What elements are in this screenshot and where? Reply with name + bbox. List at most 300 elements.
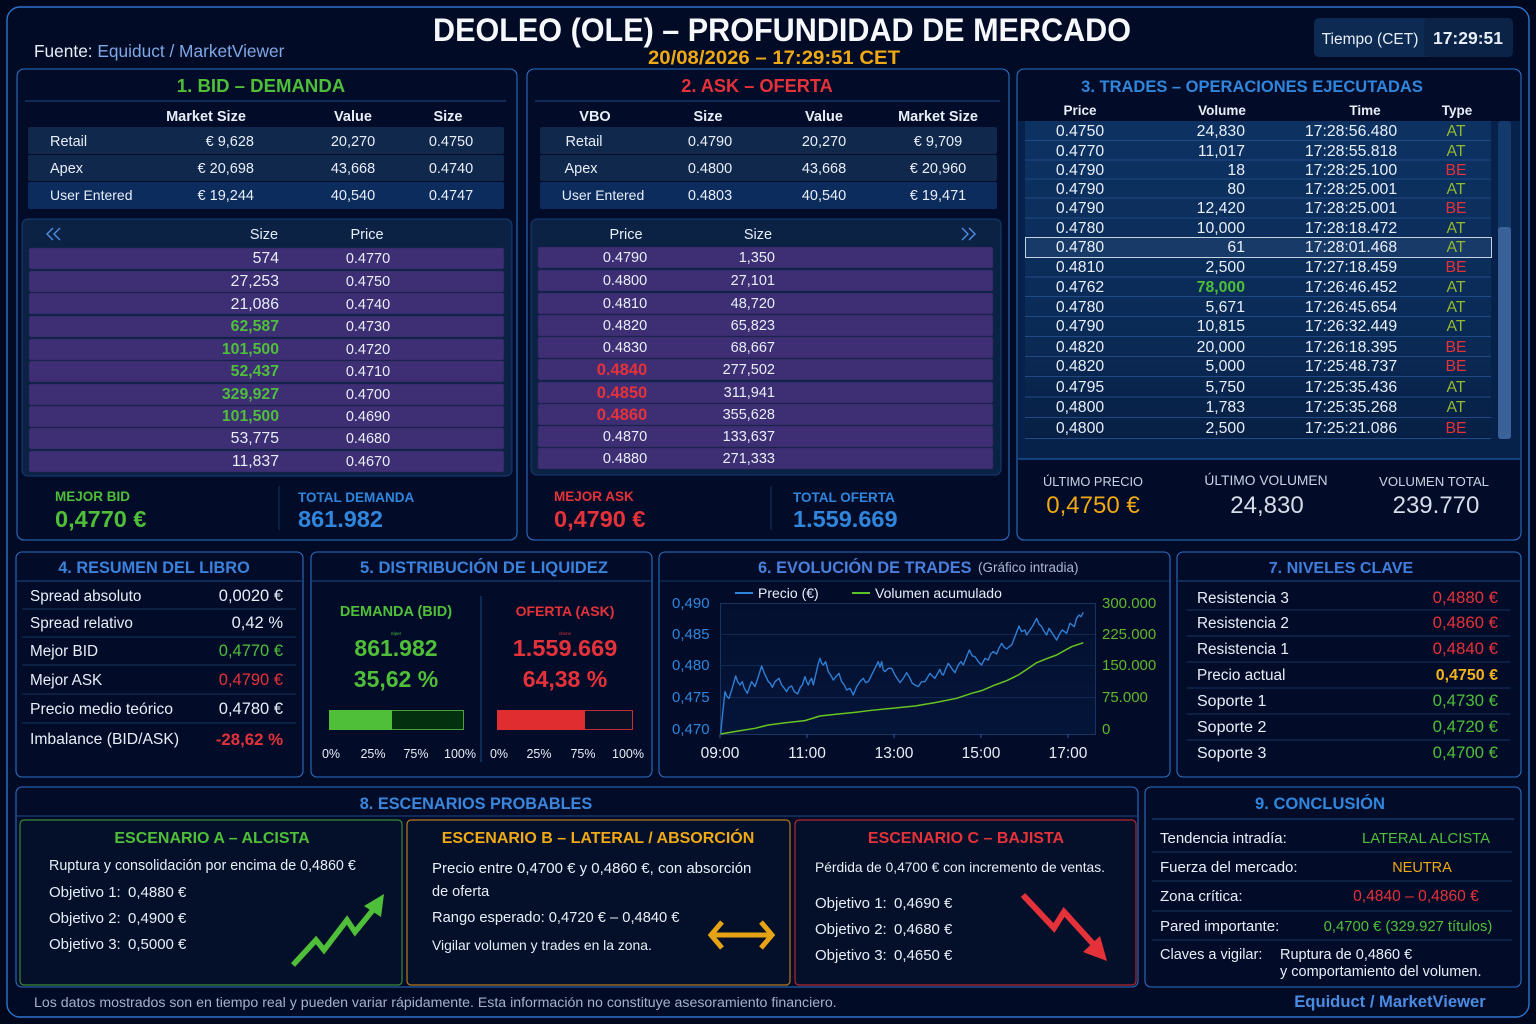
ask order book: 0.4820: [603, 318, 647, 334]
ask order book: 0.4850: [597, 384, 647, 402]
level rows: Resistencia 1: [1197, 641, 1289, 658]
stat: ultimo precio: [1043, 474, 1143, 519]
stat: ultimo volumen: 24,830: [1230, 492, 1304, 519]
scenario B: Rango esperado: 0,4720 € – 0,4840 €: [432, 910, 679, 926]
conclusion rows: Zona crítica:: [1160, 888, 1243, 905]
level rows: Soporte 1: [1197, 693, 1266, 710]
panel 1: bid: [17, 69, 517, 540]
conclusion rows: Ruptura de 0,4860 €: [1280, 947, 1412, 963]
summary rows: -28,62 %: [216, 730, 283, 749]
heading: ask: 2. ASK – OFERTA: [681, 76, 833, 96]
ask order book: 355,628: [723, 407, 775, 423]
scenario C: 0,4690 €: [894, 895, 953, 912]
trades table: 0,4800: [1056, 399, 1104, 416]
trades table: Type: [1442, 103, 1473, 118]
trades table: 0.4790: [1056, 200, 1104, 217]
trades table: 17:28:25.001: [1305, 200, 1397, 217]
bid order book: 62,587: [231, 318, 279, 335]
trades table: 80: [1227, 181, 1245, 198]
ask order book: 0.4830: [603, 340, 647, 356]
summary rows: 0,42 %: [232, 614, 283, 632]
time box: Tiempo (CET): [1322, 31, 1418, 48]
trades table: BE: [1445, 420, 1467, 437]
trades table: 17:28:55.818: [1305, 143, 1397, 160]
bid order book: 27,253: [231, 273, 279, 290]
ask order book: 0.4800: [603, 273, 647, 289]
trades table: 61: [1227, 239, 1245, 256]
ask summary table: Apex: [564, 161, 598, 177]
level rows: 0,4860 €: [1433, 613, 1499, 632]
supply column: 0%: [490, 747, 508, 761]
trades table: 17:26:32.449: [1305, 318, 1397, 335]
scenario C: Objetivo 3:: [815, 947, 887, 964]
trades table: 17:28:25.100: [1305, 162, 1397, 179]
conclusion rows: 0,4700 € (329.927 títulos): [1324, 919, 1492, 935]
ask order book: 68,667: [731, 340, 775, 356]
trades table: AT: [1446, 379, 1466, 396]
ask order book: 48,720: [731, 296, 775, 312]
panel 9: conclusion: [1145, 787, 1521, 987]
trades table: AT: [1446, 181, 1466, 198]
trades table: 17:28:18.472: [1305, 220, 1397, 237]
left axis: 0,475: [672, 689, 710, 706]
scenario A: Objetivo 1:: [49, 884, 121, 901]
bid order book: 0.4720: [346, 342, 390, 358]
trades table: 10,815: [1197, 318, 1245, 335]
trades table: BE: [1445, 358, 1467, 375]
trades table: [1018, 103, 1520, 459]
heading: bid: 1. BID – DEMANDA: [177, 75, 345, 96]
stat: volumen total: VOLUMEN TOTAL: [1379, 474, 1489, 489]
conclusion rows: NEUTRA: [1392, 860, 1452, 876]
time axis: 17:00: [1049, 745, 1088, 762]
stat: mejor ask: [554, 489, 645, 532]
scenario A: 0,5000 €: [128, 936, 187, 953]
volume line: [721, 643, 1083, 734]
trades table: 0.4790: [1056, 181, 1104, 198]
stat: ultimo volumen: [1204, 472, 1328, 519]
trades table: Volume: [1198, 103, 1246, 118]
ask summary table: [540, 109, 997, 209]
title: DEOLEO (OLE) – PROFUNDIDAD DE MERCADO: [433, 12, 1131, 48]
heading: evolucion: [758, 558, 1079, 577]
panel 2: ask: [527, 69, 1009, 540]
summary rows: Mejor ASK: [30, 672, 103, 689]
stat: total oferta: 1.559.669: [793, 506, 898, 532]
level rows: 0,4750 €: [1436, 667, 1498, 684]
summary rows: 0,4780 €: [219, 700, 283, 718]
ask summary table: 43,668: [802, 161, 846, 177]
chart legend: [735, 585, 1002, 601]
summary rows: Imbalance (BID/ASK): [30, 731, 179, 748]
heading: conclusion: 9. CONCLUSIÓN: [1255, 794, 1385, 813]
scenario B: Precio entre 0,4700 € y 0,4860 €, con absorción: [432, 860, 751, 877]
scenario A: Objetivo 2:: [49, 910, 121, 927]
demand column: nÍper: [391, 630, 402, 636]
trades table: AT: [1446, 318, 1466, 335]
heading: evolucion: (Gráfico intradia): [978, 560, 1079, 575]
stat: total demanda: 861.982: [298, 506, 383, 532]
supply column: 64,38 %: [523, 666, 607, 692]
stat: ultimo precio: ÚLTIMO PRECIO: [1043, 474, 1143, 489]
ask order book: 0.4860: [597, 406, 647, 424]
trades table: AT: [1446, 143, 1466, 160]
heading: liquidez: 5. DISTRIBUCIÓN DE LIQUIDEZ: [360, 558, 608, 577]
summary rows: 0,4790 €: [219, 671, 283, 689]
scenario A: Ruptura y consolidación por encima de 0,4860 €: [49, 858, 356, 874]
trades table: 12,420: [1197, 200, 1245, 217]
stat: mejor ask: MEJOR ASK: [554, 489, 634, 504]
trades table: 17:25:21.086: [1305, 420, 1397, 437]
trades table: 0.4820: [1056, 339, 1104, 356]
heading: resumen: 4. RESUMEN DEL LIBRO: [58, 559, 250, 577]
bid order book: 0.4680: [346, 431, 390, 447]
time box: 17:29:51: [1433, 28, 1503, 48]
bid order book: 0.4670: [346, 454, 390, 470]
bid order book: [22, 219, 512, 476]
scenario A: [20, 820, 402, 985]
trades table: 0.4780: [1056, 239, 1104, 256]
trades table: 17:25:35.268: [1305, 399, 1397, 416]
demand column: DEMANDA (BID): [340, 604, 452, 620]
selected row highlight: [1026, 238, 1492, 258]
summary rows: Precio medio teórico: [30, 701, 173, 718]
source label: Fuente: Equiduct / MarketViewer: [34, 41, 285, 61]
bid summary table: User Entered: [50, 187, 132, 203]
trades table: 5,671: [1205, 299, 1245, 316]
heading: evolucion: 6. EVOLUCIÓN DE TRADES: [758, 558, 972, 577]
time axis: [701, 745, 1088, 762]
scrollbar: [1498, 121, 1511, 439]
scenario C: 0,4650 €: [894, 947, 953, 964]
bid order book: 0.4740: [346, 297, 390, 313]
summary rows: [22, 587, 296, 749]
panel 8: escenarios: [16, 787, 1138, 987]
ask order book: 277,502: [723, 362, 775, 378]
level rows: [1187, 588, 1510, 762]
footer disclaimer: Los datos mostrados son en tiempo real y pueden variar rápidamente. Esta información no constituye asesoramiento financiero.: [34, 995, 837, 1011]
ask order book: Price: [609, 227, 643, 243]
time axis: 13:00: [875, 745, 914, 762]
ask order book: 27,101: [731, 273, 775, 289]
ask order book: 271,333: [723, 451, 775, 467]
stat: mejor bid: [55, 489, 146, 532]
scenario B: de oferta: [432, 884, 490, 900]
trades table: 17:26:18.395: [1305, 339, 1397, 356]
ask summary table: € 19,471: [910, 188, 966, 204]
trades table: 24,830: [1197, 123, 1245, 140]
stat: total oferta: [793, 490, 898, 532]
trades table: AT: [1446, 399, 1466, 416]
scenario C: Objetivo 1:: [815, 895, 887, 912]
bid summary table: Value: [334, 109, 372, 125]
ask order book: 65,823: [731, 318, 775, 334]
stat: volumen total: 239.770: [1393, 492, 1479, 519]
time axis: 11:00: [788, 745, 826, 762]
scenario A: 0,4880 €: [128, 884, 187, 901]
trades table: 17:25:35.436: [1305, 379, 1397, 396]
bid summary table: € 9,628: [206, 134, 254, 150]
bid order book: 0.4690: [346, 409, 390, 425]
level rows: 0,4700 €: [1433, 743, 1499, 762]
level rows: 0,4720 €: [1433, 717, 1499, 736]
trades table: 0.4762: [1056, 279, 1104, 296]
trades table: BE: [1445, 200, 1467, 217]
conclusion rows: Tendencia intradía:: [1160, 830, 1287, 847]
conclusion rows: Fuerza del mercado:: [1160, 859, 1298, 876]
trades table: BE: [1445, 339, 1467, 356]
trades table: 0.4770: [1056, 143, 1104, 160]
bar: demand share: [329, 710, 464, 730]
supply column: 25%: [526, 747, 552, 761]
date subtitle: 20/08/2026 – 17:29:51 CET: [648, 48, 900, 69]
ask summary table: Size: [693, 109, 723, 125]
stat: ultimo precio: 0,4750 €: [1046, 492, 1140, 519]
demand column: 25%: [360, 747, 386, 761]
bid summary table: 43,668: [331, 161, 375, 177]
bid summary table: € 20,698: [198, 161, 254, 177]
supply column: OFERTA (ASK): [516, 603, 614, 619]
trades table: 2,500: [1205, 420, 1245, 437]
demand column: 861.982: [354, 635, 438, 661]
ask summary table: VBO: [579, 109, 611, 125]
trades table: AT: [1446, 239, 1466, 256]
ask summary table: € 20,960: [910, 161, 966, 177]
left axis: 0,490: [672, 595, 710, 612]
icon: rising arrow: [293, 894, 384, 965]
bid order book: 329,927: [222, 386, 279, 403]
time axis: 15:00: [962, 745, 1001, 762]
bid order book: 101,500: [222, 341, 279, 358]
trades table: 11,017: [1198, 143, 1245, 160]
ask order book: 0.4790: [603, 250, 647, 266]
level rows: Soporte 2: [1197, 719, 1266, 736]
heading: niveles: 7. NIVELES CLAVE: [1269, 559, 1414, 577]
bid order book: 101,500: [222, 408, 279, 425]
panel 6: evolucion: [659, 552, 1170, 777]
supply column: 100%: [612, 747, 644, 761]
bid summary table: Apex: [50, 161, 84, 177]
conclusion rows: Claves a vigilar:: [1160, 947, 1262, 963]
right axis: 225.000: [1102, 626, 1156, 643]
trades table: 20,000: [1197, 339, 1245, 356]
heading: escenarios: 8. ESCENARIOS PROBABLES: [360, 795, 592, 813]
trades table: 0.4780: [1056, 299, 1104, 316]
left axis: 0,485: [672, 626, 710, 643]
stat: total oferta: TOTAL OFERTA: [793, 490, 895, 505]
icon: double chevron right: [962, 228, 975, 240]
scenario A: ESCENARIO A – ALCISTA: [114, 830, 310, 847]
ask summary table: Value: [805, 109, 843, 125]
footer brand: Equiduct / MarketViewer: [1294, 992, 1486, 1011]
panel 5: liquidez: [311, 552, 652, 777]
time box: [1314, 18, 1513, 57]
trades table: 0.4780: [1056, 220, 1104, 237]
bid order book: 0.4770: [346, 251, 390, 267]
level rows: Resistencia 2: [1197, 615, 1289, 632]
bid summary table: 40,540: [331, 188, 375, 204]
trades table: AT: [1446, 299, 1466, 316]
panel 7: niveles: [1177, 552, 1521, 777]
ask order book: 0.4810: [603, 296, 647, 312]
scenario C: ESCENARIO C – BAJISTA: [868, 830, 1065, 847]
summary rows: Spread absoluto: [30, 588, 141, 605]
trades table: 10,000: [1197, 220, 1245, 237]
stat: volumen total: [1379, 474, 1489, 519]
icon: horizontal double arrow: [711, 922, 772, 948]
bid order book: 21,086: [231, 296, 279, 313]
level rows: Resistencia 3: [1197, 590, 1289, 607]
chart legend: Volumen acumulado: [875, 585, 1002, 601]
right axis: 75.000: [1102, 689, 1148, 706]
bid summary table: 0.4747: [429, 188, 473, 204]
scenario B: ESCENARIO B – LATERAL / ABSORCIÓN: [442, 828, 754, 847]
trades table: AT: [1446, 279, 1466, 296]
line chart: [720, 604, 1096, 738]
bid summary table: € 19,244: [198, 188, 254, 204]
price line: [721, 612, 1083, 733]
supply column: cbnnn: [559, 631, 572, 636]
trades table: 17:26:45.654: [1305, 299, 1397, 316]
trades table: 17:26:46.452: [1305, 279, 1397, 296]
panel 3: trades: [1017, 69, 1521, 540]
ask summary table: 0.4790: [688, 134, 732, 150]
bid summary table: Retail: [50, 134, 87, 150]
bid order book: 0.4730: [346, 319, 390, 335]
icon: falling arrow: [1023, 895, 1107, 961]
trades table: 0,4800: [1056, 420, 1104, 437]
stat: total demanda: [298, 490, 414, 532]
trades table: 0.4795: [1056, 379, 1104, 396]
ask summary table: € 9,709: [914, 134, 962, 150]
stat: mejor bid: MEJOR BID: [55, 489, 130, 504]
panel 4: resumen: [16, 552, 303, 777]
scenario C: Pérdida de 0,4700 € con incremento de ventas.: [815, 860, 1105, 875]
stat: mejor ask: 0,4790 €: [554, 506, 645, 532]
trades table: BE: [1445, 259, 1467, 276]
ask order book: 133,637: [723, 429, 775, 445]
demand column: 75%: [403, 747, 429, 761]
stat: ultimo volumen: ÚLTIMO VOLUMEN: [1204, 472, 1328, 488]
supply column: 75%: [570, 747, 596, 761]
bid order book: 0.4700: [346, 387, 390, 403]
right axis: [1102, 595, 1156, 738]
trades table: AT: [1446, 123, 1466, 140]
trades table: 5,000: [1205, 358, 1245, 375]
left axis: 0,480: [672, 657, 710, 674]
scenario C: [795, 820, 1136, 985]
level rows: 0,4840 €: [1433, 639, 1499, 658]
trades table: Time: [1349, 103, 1381, 118]
bid summary table: Size: [433, 109, 463, 125]
ask order book: 1,350: [739, 250, 775, 266]
conclusion rows: 0,4840 – 0,4860 €: [1353, 888, 1479, 905]
icon: double chevron left: [47, 228, 60, 240]
bid summary table: 20,270: [331, 134, 375, 150]
stat: total demanda: TOTAL DEMANDA: [298, 490, 414, 505]
ask summary table: Market Size: [898, 109, 978, 125]
bid order book: 52,437: [231, 363, 279, 380]
trades table: 0.4750: [1056, 123, 1104, 140]
trades table: 78,000: [1197, 279, 1245, 296]
level rows: 0,4730 €: [1433, 691, 1499, 710]
trades table: Price: [1063, 103, 1097, 118]
bid summary table: [28, 109, 504, 209]
ask order book: 0.4880: [603, 451, 647, 467]
summary rows: Mejor BID: [30, 643, 98, 660]
supply column: [490, 603, 644, 761]
bid order book: 11,837: [232, 453, 279, 470]
trades table: 17:25:48.737: [1305, 358, 1397, 375]
left axis: [672, 595, 710, 738]
conclusion rows: Pared importante:: [1160, 918, 1279, 935]
ask order book: 0.4870: [603, 429, 647, 445]
trades table: 17:27:18.459: [1305, 259, 1397, 276]
right axis: 300.000: [1102, 595, 1156, 612]
stat: mejor bid: 0,4770 €: [55, 506, 146, 532]
bid order book: 0.4750: [346, 274, 390, 290]
chart legend: Precio (€): [758, 585, 819, 601]
bid order book: Size: [250, 227, 278, 243]
scenario B: Vigilar volumen y trades en la zona.: [432, 937, 652, 953]
left axis: 0,470: [672, 721, 710, 738]
right axis: 0: [1102, 721, 1110, 738]
conclusion rows: y comportamiento del volumen.: [1280, 964, 1482, 980]
heading: trades: 3. TRADES – OPERACIONES EJECUTADAS: [1081, 78, 1423, 96]
bid summary table: 0.4740: [429, 161, 473, 177]
demand column: 0%: [322, 747, 340, 761]
ask order book: 311,941: [724, 385, 775, 401]
summary rows: 0,4770 €: [219, 642, 283, 660]
ask summary table: 20,270: [802, 134, 846, 150]
trades table: 17:28:25.001: [1305, 181, 1397, 198]
ask summary table: User Entered: [562, 187, 644, 203]
trades table: AT: [1446, 220, 1466, 237]
demand column: 35,62 %: [354, 666, 438, 692]
trades table: 0.4790: [1056, 318, 1104, 335]
bid order book: Price: [350, 227, 384, 243]
trades table: 1,783: [1205, 399, 1245, 416]
ask order book: 0.4840: [597, 361, 647, 379]
time axis: 09:00: [701, 745, 740, 762]
trades table: 18: [1227, 162, 1245, 179]
bid order book: 574: [253, 250, 279, 267]
scenario C: 0,4680 €: [894, 921, 953, 938]
trades table: 2,500: [1205, 259, 1245, 276]
supply column: 1.559.669: [513, 635, 617, 661]
conclusion rows: [1152, 830, 1512, 980]
bid order book: 0.4710: [346, 364, 390, 380]
ask summary table: 0.4803: [688, 188, 732, 204]
ask summary table: 0.4800: [688, 161, 732, 177]
summary rows: 0,0020 €: [219, 587, 283, 605]
trades table: 17:28:01.468: [1305, 239, 1397, 256]
bid summary table: Market Size: [166, 109, 246, 125]
trades table: 0.4790: [1056, 162, 1104, 179]
trades table: 5,750: [1205, 379, 1245, 396]
demand column: [322, 604, 476, 761]
right axis: 150.000: [1102, 657, 1156, 674]
ask summary table: Retail: [565, 134, 603, 150]
ask summary table: 40,540: [802, 188, 846, 204]
summary rows: Spread relativo: [30, 615, 133, 632]
level rows: 0,4880 €: [1433, 588, 1499, 607]
scenario C: Objetivo 2:: [815, 921, 887, 938]
conclusion rows: LATERAL ALCISTA: [1362, 831, 1490, 847]
scenario A: 0,4900 €: [128, 910, 187, 927]
bid order book: 53,775: [231, 430, 279, 447]
ask order book: Size: [744, 227, 772, 243]
